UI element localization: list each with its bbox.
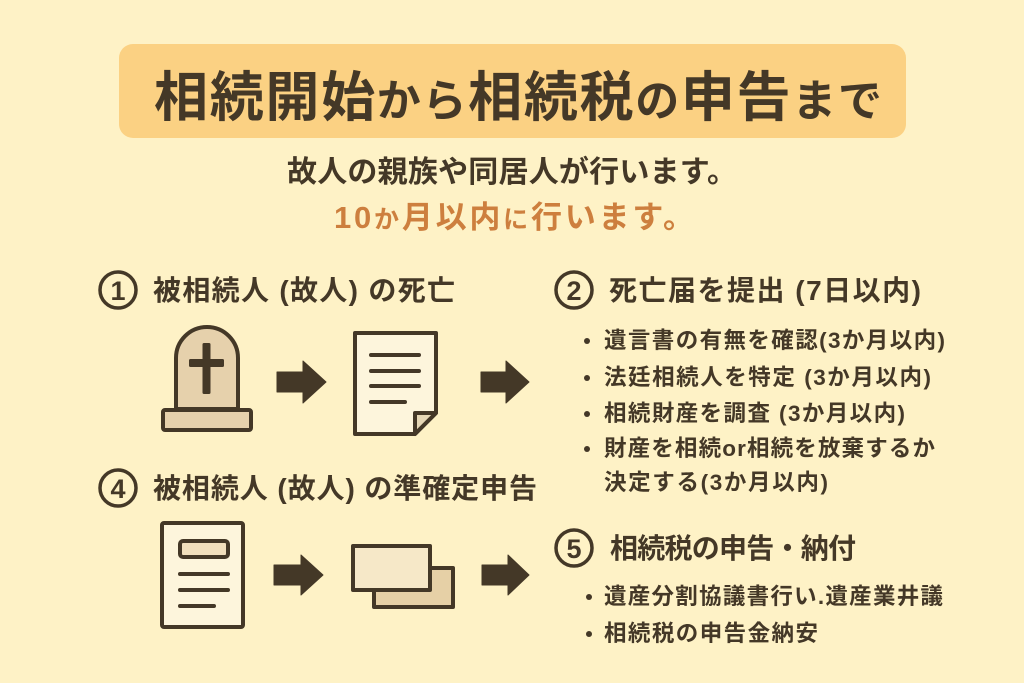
step 4 heading: 4 xyxy=(110,474,126,504)
arrow xyxy=(274,555,323,595)
arrow xyxy=(481,361,529,403)
step 2 heading: 2 xyxy=(566,276,582,306)
icon: gravestone xyxy=(163,327,251,430)
step 2 list: 遺言書の有無を確認(3か月以内) xyxy=(604,328,945,353)
step 4 heading: 被相続人 (故人) の準確定申告 xyxy=(153,473,537,504)
step 2 list: 相続財産を調査 (3か月以内) xyxy=(604,401,905,426)
arrow xyxy=(482,555,529,595)
icon: stacked cards xyxy=(353,546,453,607)
step 2 list: 財産を相続or相続を放棄するか xyxy=(604,436,935,461)
step 2 list: 決定する(3か月以内) xyxy=(604,470,828,495)
step 2 list: 法廷相続人を特定 (3か月以内) xyxy=(604,365,931,390)
step 5 list: 遺産分割協議書行い.遺産業井議 xyxy=(604,584,943,609)
title banner: 相続開始から相続税の申告まで xyxy=(154,68,882,128)
title banner xyxy=(119,44,906,138)
step 2 heading: 死亡届を提出 (7日以内) xyxy=(609,275,921,306)
icon: document with folded corner xyxy=(355,333,436,434)
step 5 heading: 相続税の申告・納付 xyxy=(610,533,856,564)
step 2 list xyxy=(584,328,945,495)
step 1 heading: 被相続人 (故人) の死亡 xyxy=(153,275,455,306)
arrow xyxy=(277,361,326,403)
deadline note: 10か月以内に行います。 xyxy=(334,200,694,235)
subtitle: 故人の親族や同居人が行います。 xyxy=(287,155,737,189)
step 5 list xyxy=(586,584,943,646)
step 5 heading: 5 xyxy=(566,534,582,564)
step 5 list: 相続税の申告金納安 xyxy=(604,621,818,646)
step 1 heading: 1 xyxy=(110,276,126,306)
icon: tax form document xyxy=(162,523,243,627)
